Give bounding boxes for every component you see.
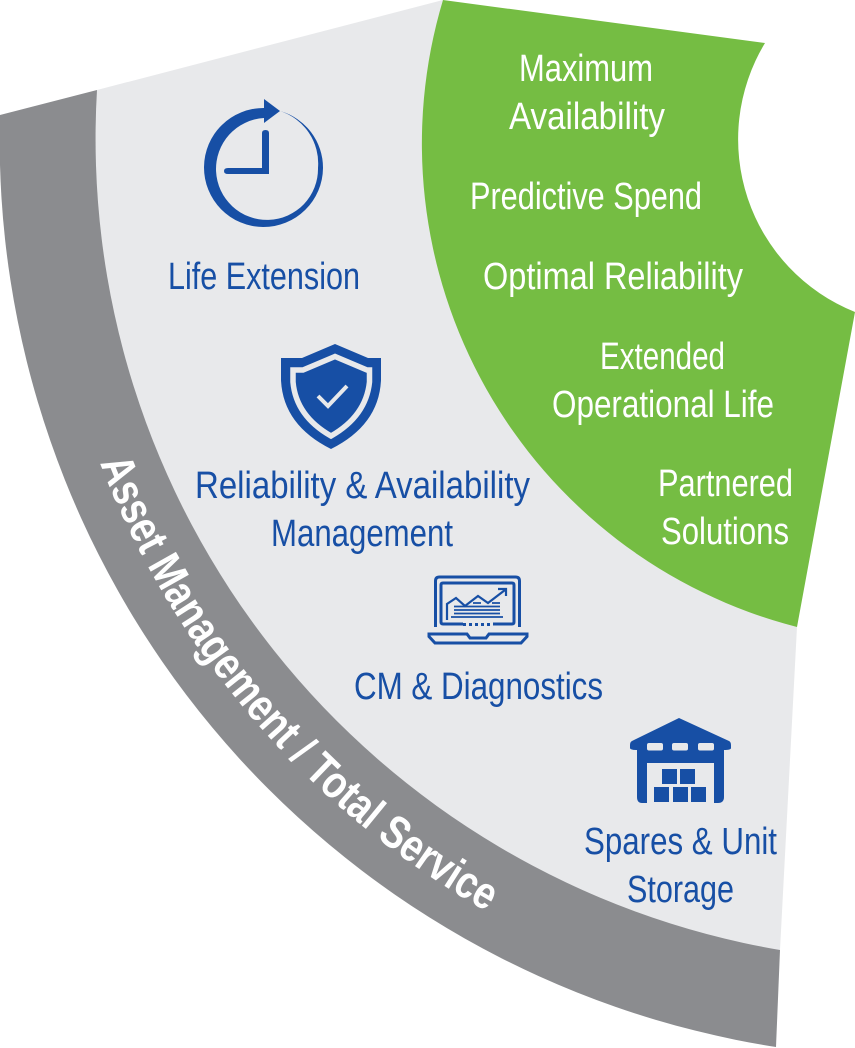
green text: Partnered Solutions: Solutions bbox=[661, 511, 789, 553]
icon: shield with check bbox=[281, 344, 381, 449]
green text: Optimal Reliability: Optimal Reliability bbox=[483, 256, 743, 298]
panel: light gray services area bbox=[96, 0, 797, 950]
icon: laptop with chart bbox=[429, 577, 527, 643]
label: CM & Diagnostics: CM & Diagnostics bbox=[354, 666, 603, 708]
label: Spares & Unit Storage bbox=[584, 821, 777, 911]
green text: Maximum Availability: Maximum bbox=[519, 48, 653, 90]
green text: Maximum Availability bbox=[509, 48, 665, 138]
icon: warehouse with boxes bbox=[630, 718, 731, 804]
green text: Maximum Availability: Availability bbox=[509, 96, 665, 138]
label: Reliability & Availability Management: Reliability & Availability bbox=[195, 465, 530, 507]
green text: Extended Operational Life bbox=[552, 336, 774, 426]
green text: Predictive Spend: Predictive Spend bbox=[470, 176, 702, 218]
green text: Extended Operational Life: Extended bbox=[600, 336, 725, 378]
label: Life Extension: Life Extension bbox=[168, 256, 360, 298]
icon: clock with arrow bbox=[204, 99, 323, 227]
green text: Partnered Solutions bbox=[658, 463, 793, 553]
label: Reliability & Availability Management bbox=[195, 465, 530, 555]
curved label: Asset Management / Total Service: Asset Management / Total Service bbox=[100, 460, 494, 908]
label: Spares & Unit Storage: Storage bbox=[627, 869, 734, 911]
green text: Partnered Solutions: Partnered bbox=[658, 463, 793, 505]
label: Spares & Unit Storage: Spares & Unit bbox=[584, 821, 777, 863]
panel: green outcomes area bbox=[422, 0, 855, 627]
label: Reliability & Availability Management: Management bbox=[271, 513, 453, 555]
green text: Extended Operational Life: Operational Life bbox=[552, 384, 774, 426]
